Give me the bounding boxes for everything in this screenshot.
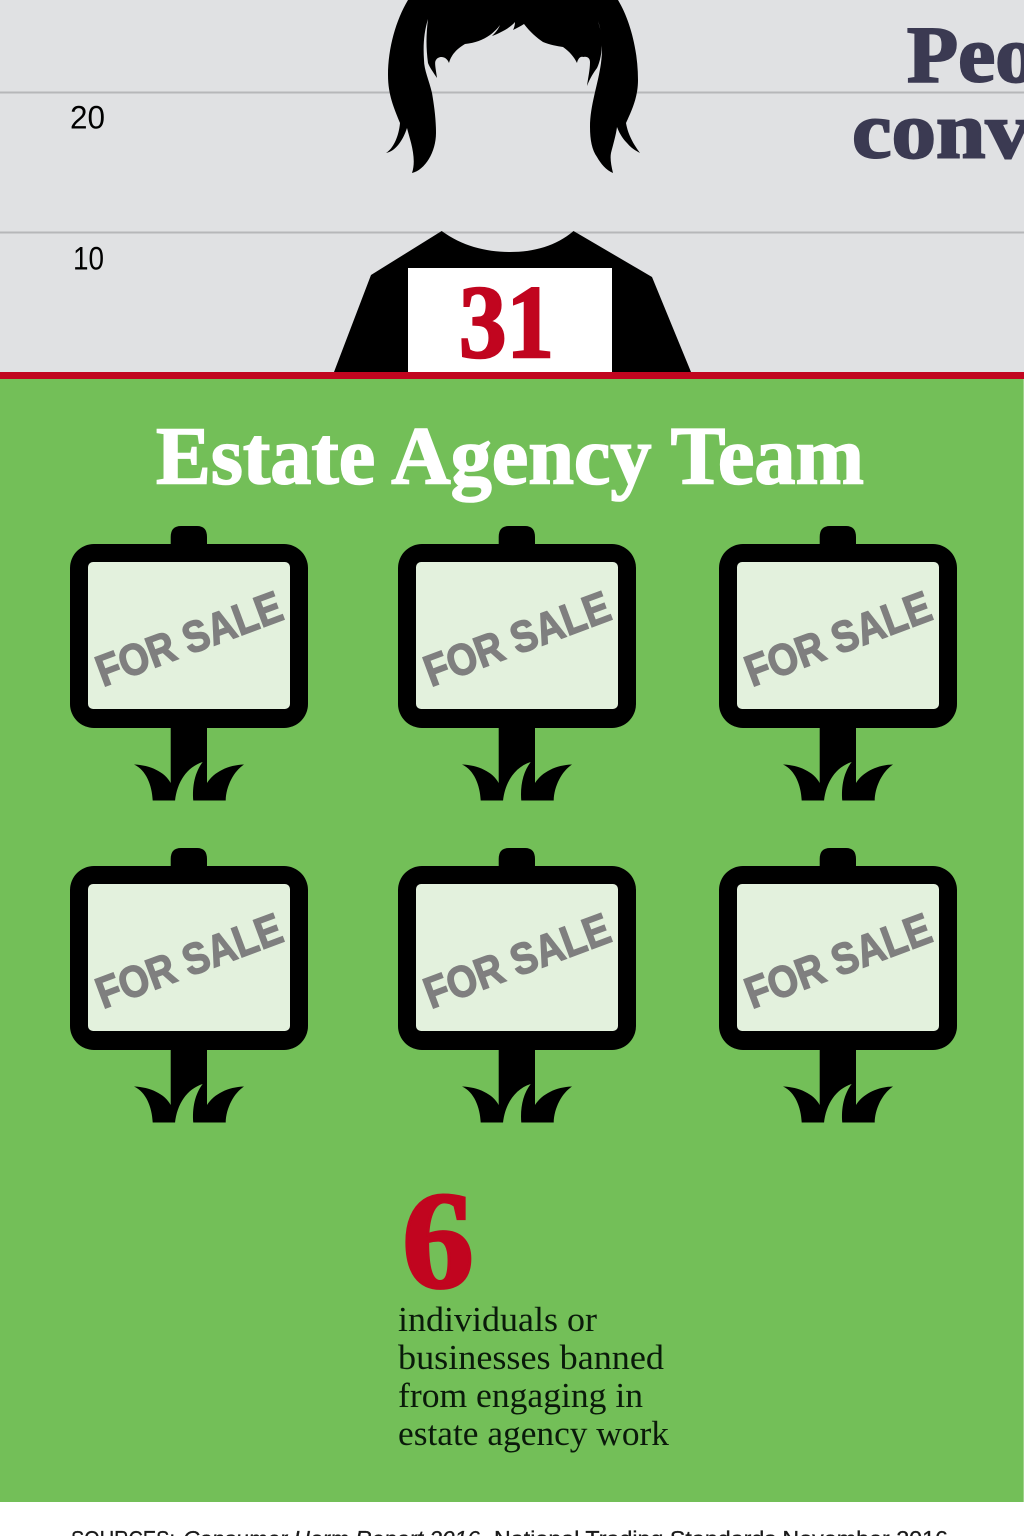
icon: for sale sign 2: FOR SALE	[417, 582, 617, 696]
icon: for sale sign 1	[70, 526, 308, 801]
divider: red bar	[0, 372, 1024, 379]
icon: for sale sign 6: FOR SALE	[738, 904, 938, 1018]
text block: banned individuals caption	[398, 1301, 670, 1453]
icon: for sale sign 6	[719, 848, 957, 1123]
icon: for sale sign 1: FOR SALE	[89, 582, 289, 696]
icon: silhouette shoulders	[334, 231, 691, 372]
placard: inmate number: 31	[459, 265, 554, 380]
text block: banned individuals caption: individuals or	[398, 1301, 598, 1339]
icon: silhouette hair	[386, 0, 640, 173]
icon: for sale sign 5	[398, 848, 636, 1123]
height label: 10: 10	[73, 240, 104, 276]
heading: Estate Agency Team: Estate Agency Team	[156, 410, 864, 502]
text block: banned individuals caption: from engaging in	[398, 1377, 643, 1415]
heading: cropped People convicted: conv	[852, 88, 1024, 176]
icon: for sale sign 3	[719, 526, 957, 801]
icon: for sale sign 5: FOR SALE	[417, 904, 617, 1018]
placard: inmate number	[408, 265, 612, 380]
text block: sources	[71, 1526, 948, 1536]
icon: for sale sign 4: FOR SALE	[89, 904, 289, 1018]
height label: 20: 20	[70, 100, 105, 136]
text block: banned individuals caption: businesses banned	[398, 1339, 664, 1377]
panel: green estate agency section	[0, 379, 1024, 1502]
panel: mugshot backdrop	[0, 0, 1024, 372]
icon: for sale sign 3: FOR SALE	[738, 582, 938, 696]
heading: cropped People convicted	[852, 12, 1024, 176]
text block: banned individuals caption: estate agency work	[398, 1415, 670, 1453]
icon: for sale sign 4	[70, 848, 308, 1123]
statistic: big number 6: 6	[402, 1164, 474, 1318]
icon: for sale sign 2	[398, 526, 636, 801]
